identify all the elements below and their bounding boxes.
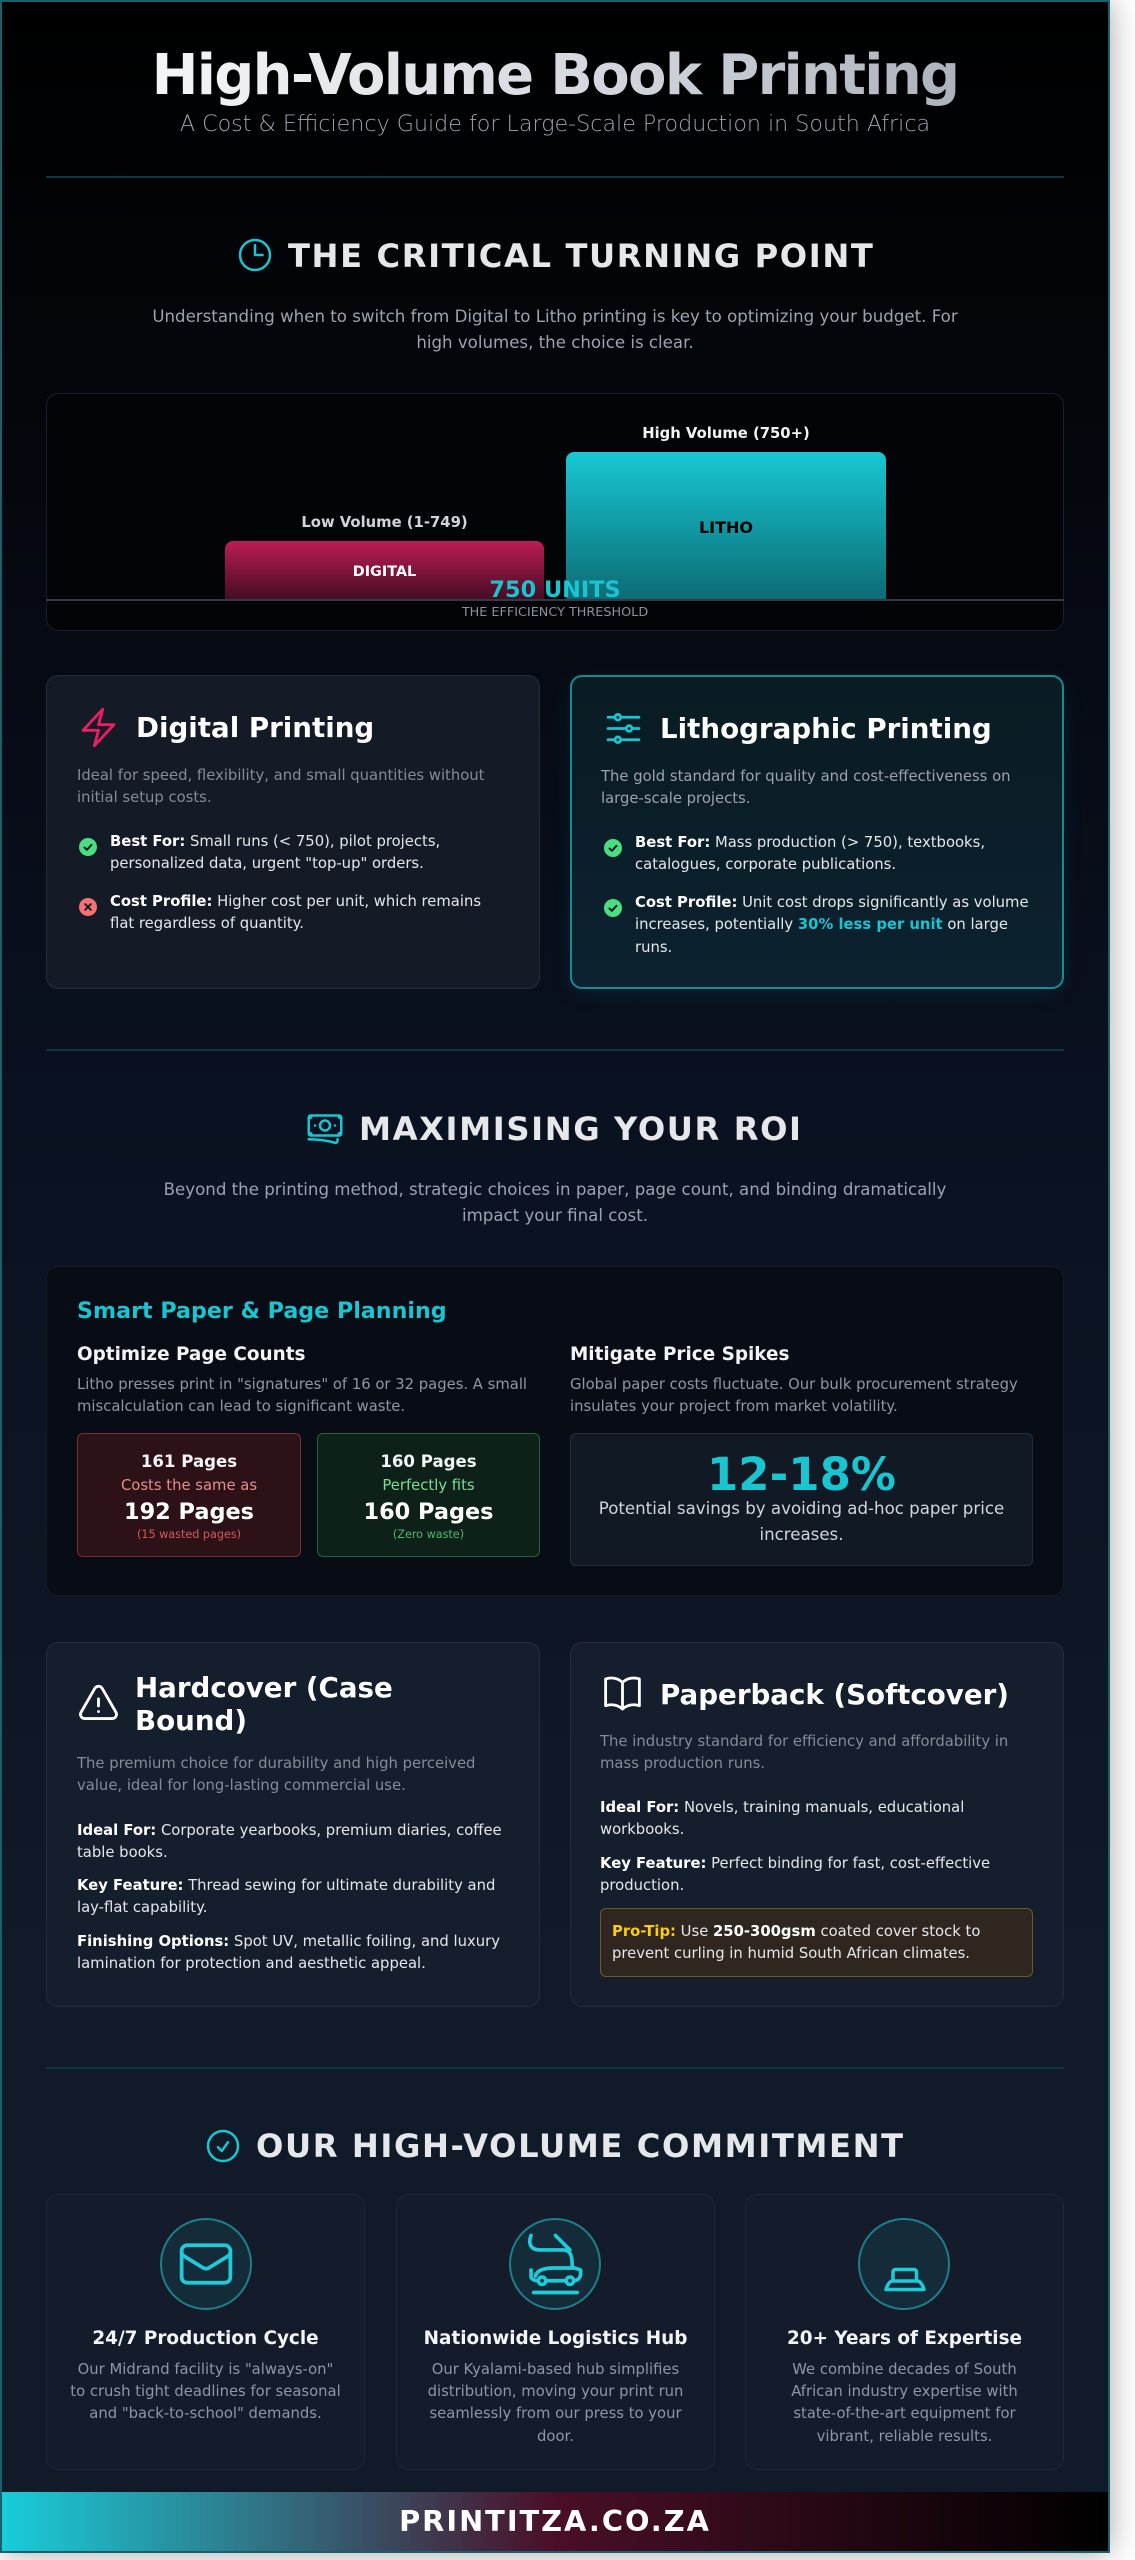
title: [0, 42, 1110, 110]
description: [70, 2360, 341, 2422]
icon: envelope badge: [160, 2218, 252, 2310]
description: The premium choice for durability and high perceived: [77, 1755, 475, 1772]
text: cost profile: Cost Profile: Higher cost per unit, which remains: [110, 893, 481, 910]
waste note: (15 wasted pages): [137, 1528, 241, 1541]
heading: Bound): [135, 1704, 247, 1737]
heading: Hardcover (Case: [135, 1671, 393, 1704]
text: best for: [635, 834, 985, 873]
label: high volume: High Volume (750+): [642, 425, 810, 442]
icon: book: [604, 1676, 641, 1710]
heading: Nationwide Logistics Hub: [424, 2328, 687, 2349]
caption: [599, 1499, 1004, 1544]
intro text: Beyond the printing method, strategic choices in paper, page count, and binding dramatically: [164, 1180, 946, 1199]
icon: check: [604, 839, 622, 857]
panel: lithographic printing: [570, 675, 1064, 989]
caption: Potential savings by avoiding ad-hoc paper price: [599, 1499, 1004, 1518]
text: best for: Best For: Small runs (< 750), pilot projects,: [110, 833, 440, 850]
text: optimize: Litho presses print in "signatures" of 16 or 32 pages. A small: [77, 1376, 527, 1393]
section heading: the critical turning point: [238, 237, 874, 275]
subheading: optimize: Optimize Page Counts: [77, 1344, 305, 1365]
text: best for: Best For: Mass production (> 750), textbooks,: [635, 834, 985, 851]
text: cost profile: flat regardless of quantity.: [110, 915, 304, 932]
heading: 20+ Years of Expertise: [787, 2328, 1022, 2349]
description: We combine decades of South: [792, 2360, 1017, 2378]
icon: cross: [79, 898, 97, 916]
callout: pro tip: [600, 1908, 1033, 1977]
text: ideal for: Ideal For: Novels, training manuals, educational: [600, 1799, 964, 1816]
text: key feature: [600, 1855, 990, 1894]
icon: clock: [238, 238, 272, 272]
text: cost profile: runs.: [635, 939, 672, 956]
icon: sliders: [606, 713, 640, 744]
text: key feature: [77, 1877, 495, 1916]
description: [600, 1733, 1008, 1772]
title: High-Volume Book Printing: [152, 43, 958, 108]
label: low volume: Low Volume (1-749): [301, 514, 468, 531]
description: large-scale projects.: [601, 790, 750, 807]
callout text: [612, 1923, 980, 1962]
panel: digital printing: [46, 675, 540, 989]
icon: check: [604, 899, 622, 917]
text: ideal for: [600, 1799, 964, 1838]
caption: increases.: [759, 1525, 844, 1544]
heading: Digital Printing: [136, 711, 374, 744]
description: initial setup costs.: [77, 789, 212, 806]
description: door.: [537, 2428, 574, 2445]
text: best for: catalogues, corporate publications.: [635, 856, 896, 873]
description: African industry expertise with: [791, 2383, 1018, 2400]
description: vibrant, reliable results.: [817, 2428, 992, 2445]
description: distribution, moving your print run: [428, 2383, 683, 2400]
callout text: Pro-Tip: Use 250-300gsm coated cover stock to: [612, 1923, 980, 1940]
text: optimize: miscalculation can lead to significant waste.: [77, 1398, 405, 1415]
description: Ideal for speed, flexibility, and small quantities without: [77, 767, 484, 784]
text: best for: [110, 833, 440, 872]
heading text: MAXIMISING YOUR ROI: [359, 1110, 803, 1148]
value: 192 Pages: [124, 1499, 254, 1525]
description: Our Kyalami-based hub simplifies: [432, 2360, 679, 2378]
section heading: maximising your roi: [308, 1110, 803, 1148]
label: digital: DIGITAL: [353, 564, 416, 580]
heading: 24/7 Production Cycle: [92, 2328, 319, 2349]
intro text: high volumes, the choice is clear.: [416, 333, 694, 352]
icon: envelope: [180, 2243, 232, 2285]
description: and "back-to-school" demands.: [89, 2405, 322, 2422]
description: value, ideal for long-lasting commercial use.: [77, 1777, 406, 1794]
icon: banknotes: [308, 1114, 342, 1144]
text: mitigate: [570, 1376, 1018, 1415]
bar: digital: [225, 541, 544, 600]
icon: truck: [528, 2234, 582, 2294]
text: finishing options: Finishing Options: Spot UV, metallic foiling, and luxury: [77, 1933, 500, 1950]
note: Costs the same as: [121, 1477, 257, 1494]
threshold value: 750 UNITS: [489, 577, 621, 603]
bar: litho: [566, 452, 886, 600]
section heading: our high-volume commitment: [206, 2127, 905, 2165]
icon: bolt: [82, 708, 116, 748]
footer band: [2, 2492, 1108, 2552]
box: 160 pages: [317, 1433, 540, 1557]
text: key feature: production.: [600, 1877, 684, 1894]
text: cost profile: Cost Profile: Unit cost drops significantly as volume: [635, 894, 1029, 911]
baseline: [46, 599, 1064, 601]
description: The gold standard for quality and cost-effectiveness on: [601, 768, 1011, 785]
panel: hardcover: [46, 1642, 540, 2007]
value: 160 Pages: [364, 1499, 494, 1525]
heading: Smart Paper & Page Planning: [77, 1298, 447, 1324]
threshold caption: THE EFFICIENCY THRESHOLD: [462, 605, 648, 620]
heading text: THE CRITICAL TURNING POINT: [288, 237, 874, 275]
text: key feature: Key Feature: Thread sewing for ultimate durability and: [77, 1877, 495, 1894]
description: state-of-the-art equipment for: [793, 2405, 1016, 2422]
icon: press: [884, 2268, 926, 2292]
panel: logistics hub: [396, 2194, 715, 2470]
description: to crush tight deadlines for seasonal: [70, 2383, 341, 2400]
text: cost profile: [635, 894, 1029, 956]
text: cost profile: [110, 893, 481, 932]
description: [600, 768, 1011, 807]
intro text: [164, 1180, 946, 1225]
text: ideal for: table books.: [77, 1844, 168, 1861]
icon: check circle: [206, 2130, 240, 2162]
text: key feature: Key Feature: Perfect binding for fast, cost-effective: [600, 1855, 990, 1872]
heading: Paperback (Softcover): [660, 1678, 1009, 1711]
description: Our Midrand facility is "always-on": [78, 2360, 333, 2378]
description: The industry standard for efficiency and affordability in: [600, 1733, 1008, 1750]
subheading: mitigate: Mitigate Price Spikes: [570, 1344, 789, 1365]
text: mitigate: insulates your project from market volatility.: [570, 1398, 898, 1415]
note: Perfectly fits: [382, 1477, 475, 1494]
panel: production cycle: [46, 2194, 365, 2470]
text: ideal for: workbooks.: [600, 1821, 684, 1838]
text: optimize: [77, 1376, 527, 1415]
panel: paperback: [570, 1642, 1064, 2007]
description: [791, 2360, 1018, 2445]
description: mass production runs.: [600, 1755, 765, 1772]
intro text: Understanding when to switch from Digital to Litho printing is key to optimizing your budget. For: [152, 307, 958, 326]
box: savings: [570, 1433, 1033, 1566]
description: [77, 767, 484, 806]
subtitle: A Cost & Efficiency Guide for Large-Scale Production in South Africa: [180, 111, 930, 137]
icon: check: [79, 838, 97, 856]
icon: warning: [79, 1684, 118, 1720]
heading text: OUR HIGH-VOLUME COMMITMENT: [256, 2127, 905, 2165]
value: 12-18%: [707, 1448, 896, 1501]
heading: [135, 1671, 393, 1737]
label: 161 Pages: [141, 1452, 237, 1471]
waste note: (Zero waste): [393, 1528, 464, 1541]
label: litho: LITHO: [699, 518, 753, 537]
description: [428, 2360, 683, 2445]
panel: expertise: [745, 2194, 1064, 2470]
intro text: [152, 307, 958, 352]
icon: award badge: [858, 2218, 950, 2310]
label: 160 Pages: [380, 1452, 477, 1471]
icon: truck badge: [509, 2218, 601, 2310]
intro text: impact your final cost.: [462, 1206, 648, 1225]
chart panel: efficiency threshold: [46, 393, 1064, 631]
box: 161 pages: [77, 1433, 301, 1557]
text: mitigate: Global paper costs fluctuate. Our bulk procurement strategy: [570, 1376, 1018, 1393]
text: ideal for: Ideal For: Corporate yearbooks, premium diaries, coffee: [77, 1822, 502, 1839]
text: finishing options: [77, 1933, 500, 1972]
callout text: prevent curling in humid South African climates.: [612, 1945, 970, 1962]
text: key feature: lay-flat capability.: [77, 1899, 207, 1916]
text: best for: personalized data, urgent "top-up" orders.: [110, 855, 424, 872]
text: finishing options: lamination for protection and aesthetic appeal.: [77, 1955, 426, 1972]
heading: Lithographic Printing: [660, 712, 992, 745]
panel: smart paper and page planning: [46, 1266, 1064, 1596]
text: cost profile: increases, potentially 30% less per unit on large: [635, 916, 1008, 933]
footer text: PRINTITZA.CO.ZA: [399, 2504, 711, 2538]
text: ideal for: [77, 1822, 502, 1861]
description: [76, 1755, 475, 1794]
description: seamlessly from our press to your: [429, 2405, 682, 2422]
